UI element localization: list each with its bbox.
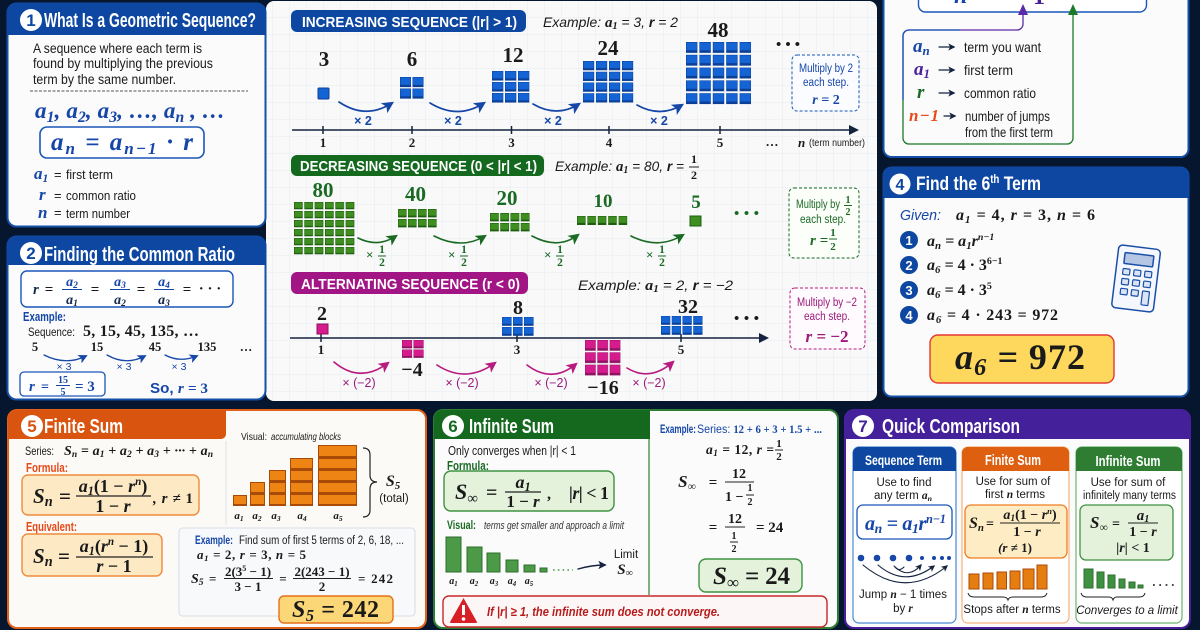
result box: S∞ = 24 <box>713 563 790 592</box>
panel 2: finding the common ratio <box>7 236 266 400</box>
green block groups <box>294 202 701 256</box>
example column: = <box>709 520 717 536</box>
visual: shrinking terms: Visual: <box>447 520 476 532</box>
legend rows <box>905 36 1053 140</box>
example card: a1 = 2, r = 3, n = 5 <box>197 547 306 563</box>
definition text: found by multiplying the previous <box>33 56 213 71</box>
visual: shrinking terms: S∞ <box>617 562 633 579</box>
term values: −4 <box>401 359 423 381</box>
example: Example: <box>23 310 66 324</box>
formula label: Formula: <box>26 460 68 475</box>
example column: 1 <box>776 438 782 450</box>
arrows ×2 <box>339 102 682 112</box>
header 7: 7 <box>858 417 868 436</box>
alternating sequence section: × (−2) <box>534 376 568 390</box>
ratio formula box: · · · <box>199 281 221 297</box>
card: sequence term: any term an <box>874 490 932 503</box>
formula box: |r| < 1 <box>569 483 609 503</box>
steps: a6 = 4 · 243 = 972 <box>927 307 1058 326</box>
ratio formula box: a1 <box>66 293 78 309</box>
example card: 3 − 1 <box>235 579 261 594</box>
steps: an = a1rn−1 <box>927 232 994 252</box>
arrows ×1/2 <box>358 235 683 243</box>
sequence terms: a1, a2, a3, …, an , … <box>35 98 225 126</box>
steps: a6 = 4 · 35 <box>927 281 992 301</box>
note: multiply by -2: each step. <box>804 311 850 323</box>
visual: accumulating blocks <box>233 431 409 523</box>
example: × 3 <box>57 361 72 373</box>
increasing sequence section: × 2 <box>544 114 562 128</box>
formula box <box>22 475 199 516</box>
equivalent formula box: a1(rn − 1) <box>80 536 148 558</box>
variable definitions: = <box>54 188 62 203</box>
variable definitions: term number <box>66 207 130 221</box>
term values: 20 <box>496 186 518 210</box>
number axis 1 <box>292 125 865 150</box>
formula label: Formula: <box>447 458 489 473</box>
variable definitions: first term <box>66 168 113 182</box>
number axis 1: 1 <box>320 135 326 150</box>
number axis 1: n <box>798 135 805 150</box>
term values: 12 <box>502 43 524 67</box>
card: infinite sum <box>1076 447 1182 623</box>
example text: Example: a1 = 80, r = <box>555 158 684 176</box>
example card: S5 <box>191 572 204 588</box>
visual: accumulating blocks: a1 <box>234 510 244 523</box>
note: multiply by 2: each step. <box>803 77 849 89</box>
equivalent label: Equivalent: <box>26 519 77 534</box>
header 6: Infinite Sum <box>469 416 554 438</box>
formula box: S∞ <box>455 479 478 507</box>
example: 45 <box>149 340 161 354</box>
formula box: a1(1 − rn) <box>79 476 147 498</box>
header 7 <box>845 410 1190 439</box>
decreasing sequence section: × <box>544 247 551 262</box>
ratio formula box: a4 <box>158 275 170 291</box>
header 2: Finding the Common Ratio <box>44 244 235 266</box>
result ratio box: 15 <box>58 375 68 386</box>
result ratio box: = <box>41 380 49 395</box>
visual: accumulating blocks: Visual: <box>241 431 267 443</box>
card: infinite sum: Use for sum of <box>1091 477 1166 489</box>
warning callout: If |r| ≥ 1, the infinite sum does not converge. <box>487 604 720 619</box>
decreasing sequence section: 2 <box>461 257 467 269</box>
note: multiply by -2: r = −2 <box>806 327 848 346</box>
note: multiply by one half: 1 <box>830 227 836 239</box>
example column: 12 <box>732 467 746 482</box>
example column: 1 <box>748 483 752 494</box>
example card: 2 <box>319 579 325 594</box>
connector arrows <box>903 4 1078 144</box>
equivalent formula box: = <box>58 544 70 568</box>
decreasing sequence section: × <box>646 247 653 262</box>
decreasing sequence section <box>291 152 859 269</box>
term values: 80 <box>312 178 334 202</box>
card: finite sum: Use for sum of <box>976 476 1051 488</box>
visual: accumulating blocks: a2 <box>252 510 262 523</box>
dots: ••• <box>734 311 759 327</box>
example column: 12 <box>728 512 742 527</box>
number axis 1: 5 <box>717 135 724 150</box>
header 4 <box>883 167 1189 198</box>
note: multiply by -2 <box>790 288 865 349</box>
example card <box>179 528 415 616</box>
term values: 2 <box>317 303 327 325</box>
number axis 1: 3 <box>508 135 515 150</box>
term values: 3 <box>319 47 329 71</box>
note: multiply by 2 <box>792 55 859 111</box>
header 1 <box>7 3 266 35</box>
header 1: 1 <box>26 11 36 30</box>
number axis 2: 3 <box>514 342 521 357</box>
card: infinite sum: Infinite Sum <box>1096 454 1160 470</box>
variable definitions: a1 <box>34 164 48 185</box>
example text <box>555 152 699 182</box>
example text: Example: a1 = 3, r = 2 <box>543 14 678 32</box>
example column: Series: 12 + 6 + 3 + 1.5 + ... <box>697 424 822 436</box>
card: sequence term: Use to find <box>877 477 931 489</box>
alternating block groups <box>317 316 704 377</box>
number axis 2: 5 <box>678 342 685 357</box>
header 4: 4 <box>896 177 905 194</box>
legend rows: from the first term <box>965 124 1053 140</box>
steps: 4 <box>905 308 913 323</box>
legend rows: number of jumps <box>965 108 1050 124</box>
term values: 48 <box>708 18 728 42</box>
equivalent formula box: Sn <box>33 544 53 570</box>
alternating sequence section: × (−2) <box>342 376 376 390</box>
example: … <box>240 340 252 354</box>
variable definitions: n <box>38 203 47 222</box>
example column: Example: <box>660 424 696 436</box>
steps <box>900 231 1058 326</box>
result ratio box: 5 <box>60 387 66 398</box>
banner: decreasing: DECREASING SEQUENCE (0 < |r| < 1) <box>300 158 537 175</box>
given: Given: <box>900 207 941 224</box>
given: a1 = 4, r = 3, n = 6 <box>956 207 1095 226</box>
visual: shrinking terms: a4 <box>508 576 517 588</box>
equivalent formula box: r − 1 <box>96 556 132 576</box>
term values: 24 <box>598 36 619 60</box>
ratio formula box: = <box>137 282 145 298</box>
icon: calculator <box>1111 245 1161 312</box>
ratio formula box: a2 <box>66 275 78 291</box>
series line: Series: <box>25 444 54 458</box>
example card: = 242 <box>358 571 393 586</box>
banner: increasing: INCREASING SEQUENCE (|r| > 1) <box>302 14 517 31</box>
header 5 <box>8 410 226 439</box>
term values: 10 <box>594 191 612 212</box>
decreasing sequence section: 1 <box>659 244 665 256</box>
visual: accumulating blocks: S5 <box>386 473 401 492</box>
card: infinite sum: infinitely many terms <box>1083 490 1176 502</box>
panel 4: find the 6th term <box>883 167 1189 396</box>
ratio formula box: r <box>33 282 39 298</box>
example card: = <box>209 571 216 586</box>
decreasing sequence section: 1 <box>461 244 467 256</box>
card: finite sum: 1 − r <box>1013 525 1041 540</box>
term values <box>312 178 701 213</box>
number axis 2 <box>290 333 769 357</box>
formula box: = <box>59 484 71 508</box>
note: multiply by one half: Multiply by <box>796 199 840 211</box>
legend rows: common ratio <box>964 85 1036 101</box>
term values: 32 <box>678 296 698 318</box>
definition text <box>33 41 213 87</box>
steps: a6 = 4 · 36−1 <box>927 256 1003 276</box>
decreasing sequence section: 2 <box>557 257 563 269</box>
legend rows: a1 <box>914 59 930 81</box>
example column: S∞ <box>678 472 696 493</box>
card: infinite sum: Converges to a limit <box>1076 605 1179 617</box>
result box <box>930 335 1114 383</box>
visual: accumulating blocks: accumulating blocks <box>271 431 342 443</box>
conclusion: So, r = 3 <box>150 380 208 397</box>
example: 5 <box>32 340 38 354</box>
card: sequence term: by r <box>893 603 913 615</box>
visual: shrinking terms: Limit <box>614 549 639 561</box>
visual: shrinking terms: terms get smaller and approach a limit <box>484 520 625 532</box>
decreasing sequence section: × <box>448 247 455 262</box>
formula box <box>444 471 614 511</box>
formula box: 1 − r <box>95 496 132 516</box>
alternating sequence section <box>290 272 865 399</box>
example column <box>660 424 822 555</box>
note: multiply by one half: 1 <box>846 195 850 206</box>
series line: Sn = a1 + a2 + a3 + ··· + an <box>64 444 213 460</box>
example text: 1 <box>691 152 697 166</box>
formula box: , <box>547 486 551 503</box>
number axis 1: (term number) <box>809 138 865 149</box>
legend rows: n−1 <box>909 106 939 125</box>
steps: 2 <box>905 258 913 273</box>
variable definitions: = <box>54 205 62 220</box>
example text: Example: a1 = 2, r = −2 <box>578 277 733 295</box>
note: multiply by 2: r = 2 <box>812 93 840 108</box>
example column: = <box>709 475 717 491</box>
visual: shrinking terms: a1 <box>449 576 458 588</box>
formula box: a1 <box>515 472 531 494</box>
panel 1: what is a geometric sequence <box>7 3 266 226</box>
decreasing sequence section: 2 <box>659 257 665 269</box>
ratio formula box: = <box>45 282 53 298</box>
number axis 2: 1 <box>318 342 324 357</box>
visual: accumulating blocks: a4 <box>297 510 307 523</box>
increasing sequence section: × 2 <box>354 114 372 128</box>
card: finite sum: (r ≠ 1) <box>998 540 1032 555</box>
header 4: Find the 6th Term <box>916 173 1041 195</box>
header 5: 5 <box>27 417 37 436</box>
banner: alternating: ALTERNATING SEQUENCE (r < 0) <box>301 276 520 293</box>
example: × 3 <box>117 361 132 373</box>
increasing sequence section <box>291 10 865 150</box>
result box: S5 = 242 <box>292 597 379 625</box>
result box: a6 = 972 <box>955 337 1085 381</box>
decreasing sequence section: 2 <box>379 257 385 269</box>
increasing sequence section: × 2 <box>650 114 668 128</box>
ratio formula box <box>21 271 233 309</box>
example: 5, 15, 45, 135, … <box>83 323 199 340</box>
note: multiply by one half: 2 <box>846 207 850 218</box>
steps: 1 <box>905 233 913 248</box>
panel 6: infinite sum <box>434 410 838 628</box>
term values: −16 <box>587 377 619 399</box>
note: multiply by -2: Multiply by −2 <box>797 297 857 309</box>
example: 135 <box>198 340 216 354</box>
example card: 2(35 − 1) <box>225 564 271 579</box>
convergence condition: Only converges when |r| < 1 <box>448 443 576 458</box>
card: finite sum: first n terms <box>985 489 1045 501</box>
card: finite sum <box>962 447 1069 623</box>
equivalent formula box <box>22 534 162 576</box>
result ratio box <box>20 372 105 398</box>
example: × 3 <box>172 361 187 373</box>
visual: shrinking terms: a2 <box>470 576 479 588</box>
header 2: 2 <box>26 244 36 263</box>
formula box (top cut off) <box>918 0 1146 12</box>
result ratio box: = 3 <box>75 379 95 395</box>
note: multiply by one half: r = <box>810 233 828 249</box>
visual: accumulating blocks: a3 <box>271 510 281 523</box>
note: multiply by one half <box>789 188 859 258</box>
example column: a1 = 12, r = <box>706 442 774 458</box>
card: finite sum: Stops after n terms <box>963 604 1061 616</box>
example column: 2 <box>776 451 782 463</box>
example card: = <box>279 571 287 586</box>
example column: 2 <box>732 544 736 555</box>
recursive formula box: an = an−1 · r <box>51 129 193 158</box>
ratio formula box: a2 <box>114 293 126 309</box>
panel 7: quick comparison <box>845 410 1190 628</box>
ratio formula box: a3 <box>158 293 170 309</box>
card: finite sum: Finite Sum <box>985 453 1041 469</box>
card: infinite sum: = <box>1112 517 1120 532</box>
alternating sequence section: × (−2) <box>632 376 666 390</box>
example card: 2(243 − 1) <box>294 564 350 579</box>
example column: 1 − <box>725 490 744 505</box>
visual: accumulating blocks: a5 <box>333 510 343 523</box>
example column: 1 <box>732 531 736 542</box>
number axis 1: … <box>766 134 778 149</box>
card: sequence term: Sequence Term <box>865 452 942 468</box>
visual: shrinking terms <box>446 520 639 588</box>
header 5: Finite Sum <box>44 416 123 438</box>
card: infinite sum: S∞ <box>1090 513 1108 534</box>
legend rows: first term <box>964 62 1013 78</box>
header 6 <box>434 410 650 439</box>
term values: 6 <box>407 47 417 71</box>
formula box: , r ≠ 1 <box>152 491 193 507</box>
header 6: 6 <box>448 417 458 436</box>
example <box>23 310 252 373</box>
ratio formula box: = <box>91 282 99 298</box>
ratio formula box: = <box>183 282 191 298</box>
note: multiply by 2: Multiply by 2 <box>799 63 853 75</box>
example: Sequence: <box>28 327 75 339</box>
header 7: Quick Comparison <box>882 416 1020 438</box>
panel 5: finite sum <box>8 410 426 628</box>
legend rows: r <box>917 82 925 103</box>
dots: ••• <box>776 37 800 53</box>
definition text: A sequence where each term is <box>33 41 202 56</box>
example column: = 24 <box>756 520 784 536</box>
number axis 1: 4 <box>606 135 613 150</box>
term values: 40 <box>405 182 426 206</box>
note: multiply by one half: each step. <box>800 214 846 226</box>
decreasing sequence section: 1 <box>557 244 563 256</box>
visual: shrinking terms: a3 <box>490 576 499 588</box>
increasing sequence section: × 2 <box>444 114 462 128</box>
note: multiply by one half: 2 <box>830 241 836 253</box>
card: finite sum: a1(1 − rn) <box>1003 506 1057 524</box>
card: sequence term <box>853 447 956 623</box>
visual: accumulating blocks: (total) <box>379 493 409 505</box>
formula box: = <box>486 482 497 504</box>
card: infinite sum: 1 − r <box>1129 525 1157 540</box>
arrows ×(−2) <box>334 362 673 374</box>
result ratio box: r <box>29 379 35 395</box>
ratio formula box: a3 <box>114 275 126 291</box>
blue block groups <box>318 42 753 106</box>
steps: 3 <box>905 283 913 298</box>
variable definitions: common ratio <box>66 189 136 203</box>
warning callout <box>443 596 827 627</box>
term values <box>317 296 698 399</box>
panel: sequence types background <box>266 1 877 401</box>
definition text: term by the same number. <box>33 72 176 87</box>
term values: 8 <box>513 297 523 319</box>
dots: ••• <box>734 206 759 222</box>
legend rows: an <box>913 36 930 58</box>
result box <box>699 559 802 592</box>
term values: 5 <box>691 192 701 213</box>
example: 15 <box>91 340 103 354</box>
example card: Example: <box>195 535 233 547</box>
number axis 1: 2 <box>409 135 415 150</box>
decreasing sequence section: × <box>366 247 373 262</box>
header 1: What Is a Geometric Sequence? <box>44 10 256 32</box>
card: infinite sum: a1 <box>1137 508 1149 525</box>
legend rows: term you want <box>964 39 1041 55</box>
decreasing sequence section: 1 <box>379 244 385 256</box>
example text: 2 <box>691 168 697 182</box>
example column: 2 <box>748 497 752 508</box>
example card: Find sum of first 5 terms of 2, 6, 18, ... <box>239 535 404 547</box>
alternating sequence section: × (−2) <box>445 376 479 390</box>
card: finite sum: Sn <box>969 515 984 534</box>
card: finite sum: = <box>986 517 994 532</box>
visual: shrinking terms: a5 <box>525 576 534 588</box>
panel 3: explicit formula legend <box>884 0 1188 157</box>
formula box: 1 − r <box>506 492 540 511</box>
card: sequence term: an = a1rn−1 <box>865 512 946 536</box>
formula box: Sn <box>33 484 53 510</box>
term values <box>319 18 728 71</box>
variable definitions: = <box>54 167 62 182</box>
header 2 <box>7 236 266 266</box>
variable definitions <box>34 164 136 222</box>
card: sequence term: Jump n − 1 times <box>859 589 947 601</box>
card: infinite sum: |r| < 1 <box>1116 541 1150 556</box>
variable definitions: r <box>39 185 46 204</box>
